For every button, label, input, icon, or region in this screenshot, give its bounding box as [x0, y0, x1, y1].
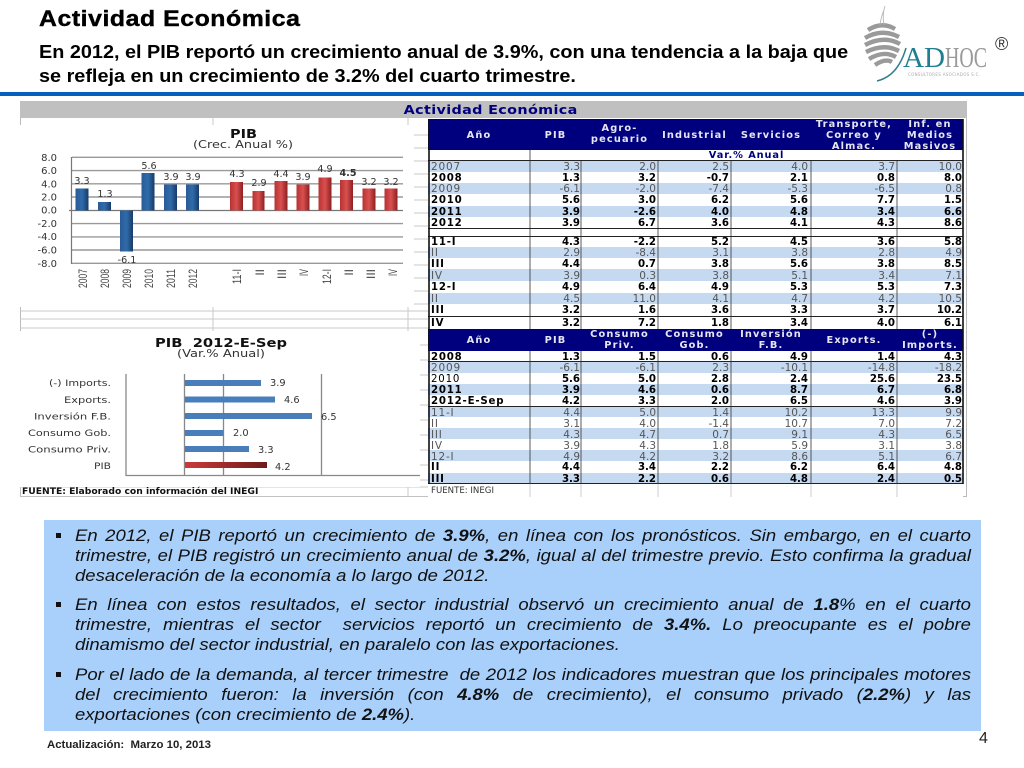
- table: demand rows: 2.0: [711, 396, 729, 407]
- panel: PIB 2012-E-Sep chart: Consumo Priv.: [28, 444, 111, 456]
- table: annual rows: 2012: [431, 218, 463, 229]
- table: demand rows: 1.8: [712, 440, 729, 452]
- table: quarterly rows: II: [431, 247, 439, 259]
- panel: PIB annual chart: 3.9: [295, 172, 311, 183]
- logo: ADHOC: AD: [903, 42, 945, 74]
- table: quarterly rows: 3.8: [712, 270, 729, 282]
- panel: PIB annual chart: 4.0: [41, 180, 57, 190]
- table: actividad header: Año: [467, 130, 491, 141]
- table: demand rows: 0.6: [711, 352, 729, 363]
- band heading: Actividad Económica: [404, 102, 578, 117]
- table: demand rows: 3.2: [712, 451, 729, 463]
- table: annual rows: -6.5: [874, 183, 895, 195]
- table: demand rows: 5.0: [638, 374, 656, 385]
- table: demand rows: 8.7: [790, 385, 808, 396]
- panel: PIB annual chart: -2.0: [37, 219, 57, 230]
- panel: PIB annual chart: -6.1: [118, 255, 136, 266]
- bullet 2: En línea con estos resultados, el sector industrial observó un crecimiento anual de 1.8% en el cuarto: [75, 595, 971, 614]
- table: quarterly rows: 10.2: [937, 305, 962, 316]
- table: quarterly rows: 1.8: [711, 318, 729, 329]
- table: quarterly rows: III: [431, 305, 445, 316]
- table: demand header: PIB: [545, 335, 566, 346]
- table: demand rows: 1.5: [638, 352, 656, 363]
- table: demand rows: 3.1: [878, 440, 895, 452]
- table: demand rows: 4.2: [562, 396, 580, 407]
- table: demand rows: 0.6: [711, 474, 729, 485]
- panel: PIB 2012-E-Sep chart: Exports.: [64, 395, 111, 406]
- table: quarterly rows: 4.2: [878, 293, 895, 305]
- table: annual rows: -0.7: [707, 173, 729, 184]
- table: annual rows: 10.0: [939, 161, 962, 173]
- table: demand rows: 6.5: [945, 429, 962, 441]
- panel: PIB 2012-E-Sep chart: PIB: [94, 461, 111, 472]
- table: demand rows: 4.4: [562, 462, 580, 473]
- panel: PIB annual chart: 4.9: [317, 164, 333, 175]
- table: quarterly rows: 10.5: [939, 293, 962, 305]
- table: quarterly rows: 2.8: [878, 247, 895, 259]
- table: demand rows: -10.1: [781, 362, 808, 374]
- table: demand header: Exports.: [826, 335, 882, 346]
- bullet 3: exportaciones (con crecimiento de 2.4%).: [75, 705, 415, 724]
- table: quarterly rows: 4.9: [945, 247, 962, 259]
- table: demand rows: 3.3: [562, 474, 580, 485]
- table: demand rows: 1.4: [712, 407, 729, 419]
- table: demand rows: 4.0: [639, 418, 656, 430]
- table: quarterly rows: 3.3: [790, 305, 808, 316]
- panel: PIB annual chart: 1.3: [97, 189, 113, 200]
- table: quarterly rows: 4.5: [790, 237, 808, 248]
- table: annual rows: 5.6: [562, 195, 580, 206]
- table: demand rows: 7.2: [945, 418, 962, 430]
- panel: PIB 2012-E-Sep chart: Consumo Gob.: [28, 428, 111, 439]
- panel: PIB 2012-E-Sep chart: 6.5: [321, 412, 337, 423]
- table: quarterly rows: 4.4: [562, 259, 580, 270]
- table: demand rows: 5.6: [562, 374, 580, 385]
- panel: PIB 2012-E-Sep chart: PIB 2012-E-Sep: [155, 335, 287, 350]
- panel: PIB 2012-E-Sep chart: Inversión F.B.: [34, 412, 111, 422]
- table: quarterly rows: 6.1: [944, 318, 962, 329]
- bullet 1: desaceleración de la economía a lo largo de 2012.: [75, 566, 489, 585]
- footer date: Actualización: Marzo 10, 2013: [47, 739, 211, 751]
- table: annual rows: 1.3: [562, 173, 580, 184]
- table: demand rows: 0.5: [944, 474, 962, 485]
- panel: PIB annual chart: IV: [386, 269, 400, 276]
- table: demand rows: FUENTE: INEGI: [431, 486, 494, 496]
- table: quarterly rows: 1.6: [638, 305, 656, 316]
- bullet 2: dinamismo del sector industrial, en paralelo con las exportaciones.: [75, 635, 620, 654]
- table: demand rows: 4.8: [944, 462, 962, 473]
- table: annual rows: 2.1: [790, 173, 808, 184]
- table: quarterly rows: II: [431, 293, 439, 305]
- table: annual rows: 6.2: [711, 195, 729, 206]
- table: demand header: Inversión: [740, 329, 802, 340]
- table: annual rows: 2007: [431, 161, 461, 173]
- table: demand rows: 4.3: [944, 352, 962, 363]
- panel: PIB 2012-E-Sep chart: 2.0: [233, 428, 249, 439]
- table: quarterly rows: 3.4: [790, 318, 808, 329]
- bullet 3: Por el lado de la demanda, al tercer trimestre de 2012 los indicadores muestran que los principales motores: [75, 665, 971, 684]
- logo: ADHOC: HOC: [945, 42, 987, 74]
- table: quarterly rows: 7.1: [945, 270, 962, 282]
- table: annual rows: 8.6: [944, 218, 962, 229]
- table: annual rows: 2.5: [712, 161, 729, 173]
- table: demand rows: 10.2: [785, 407, 808, 419]
- table: demand rows: -1.4: [708, 418, 729, 430]
- panel: PIB 2012-E-Sep chart: (-) Imports.: [49, 378, 111, 389]
- table: quarterly rows: 3.2: [562, 305, 580, 316]
- table: demand rows: 25.6: [870, 374, 895, 385]
- table: demand rows: 13.3: [872, 407, 895, 419]
- table: demand header: [428, 329, 963, 351]
- table: annual rows: -5.3: [788, 183, 808, 195]
- logo: ADHOC: [864, 6, 1008, 82]
- panel: PIB annual chart: 2010: [142, 269, 156, 288]
- table: quarterly rows: 3.6: [711, 305, 729, 316]
- panel: PIB annual chart: 5.6: [141, 161, 157, 172]
- table: quarterly rows: 5.3: [790, 282, 808, 293]
- table: quarterly rows: 3.6: [877, 237, 895, 248]
- table: quarterly rows: 8.5: [944, 259, 962, 270]
- table: demand rows: 5.9: [791, 440, 808, 452]
- table: actividad header: Servicios: [741, 130, 801, 141]
- table: demand rows: II: [431, 418, 439, 430]
- panel: PIB annual chart: 3.2: [383, 177, 399, 188]
- panel: PIB annual chart: 2009: [120, 269, 134, 288]
- table: demand rows: 4.3: [639, 440, 656, 452]
- table: annual rows: -2.0: [636, 183, 656, 195]
- table: annual rows: 0.8: [945, 183, 962, 195]
- table: demand header: Imports.: [902, 340, 958, 350]
- page number: 4: [979, 730, 988, 747]
- panel: PIB annual chart: 0.0: [41, 206, 57, 216]
- table: demand rows: 3.9: [562, 385, 580, 396]
- table: annual rows: 4.0: [711, 207, 729, 218]
- table: demand rows: III: [431, 474, 445, 485]
- table: actividad header: [428, 119, 963, 150]
- table: quarterly rows: -8.4: [636, 247, 656, 259]
- table: demand rows: 11-I: [431, 407, 454, 419]
- table: actividad header: Medios: [907, 130, 953, 141]
- table: demand rows: 6.2: [790, 462, 808, 473]
- panel: PIB annual chart: -6.0: [37, 246, 57, 256]
- panel: PIB annual chart: IV: [297, 269, 311, 276]
- panel: PIB annual chart: 2012: [186, 269, 200, 288]
- table: demand rows: 2.4: [877, 474, 895, 485]
- source note: chart: FUENTE: Elaborado con información del INEGI: [22, 486, 258, 497]
- table: demand rows: 1.3: [562, 352, 580, 363]
- panel: PIB annual chart: III: [275, 269, 289, 279]
- table: demand rows: 4.9: [563, 451, 580, 463]
- table: annual rows: 5.6: [790, 195, 808, 206]
- bullet 3: [56, 665, 971, 724]
- panel: PIB annual chart: 8.0: [41, 153, 57, 164]
- table: demand rows: [428, 352, 963, 497]
- table: annual rows: 2010: [431, 195, 463, 206]
- table: demand rows: 5.0: [639, 407, 656, 419]
- table: demand rows: 0.7: [712, 429, 729, 441]
- table: annual rows: 3.9: [562, 218, 580, 229]
- table: demand rows: 2012-E-Sep: [431, 396, 504, 407]
- table: demand rows: 3.9: [944, 396, 962, 407]
- table: demand rows: 2.2: [711, 462, 729, 473]
- table: annual rows: 3.2: [638, 173, 656, 184]
- panel: PIB annual chart: 4.5: [340, 168, 356, 179]
- table: demand header: (-): [922, 329, 938, 340]
- table: annual rows: 8.0: [944, 173, 962, 184]
- table: annual rows: 3.6: [711, 218, 729, 229]
- table: demand rows: 4.6: [877, 396, 895, 407]
- table: actividad header: Agro-: [602, 123, 637, 134]
- table: demand header: Año: [467, 335, 491, 346]
- table: demand rows: 4.3: [563, 429, 580, 441]
- table: quarterly rows: 5.6: [790, 259, 808, 270]
- table: quarterly rows: 4.0: [877, 318, 895, 329]
- table: demand rows: 9.9: [945, 407, 962, 419]
- panel: PIB annual chart: 2007: [76, 269, 90, 288]
- panel: PIB 2012-E-Sep chart: (Var.% Anual): [177, 348, 265, 360]
- bullet 2: trimestre, mientras el sector servicios reportó un crecimiento de 3.4%. Lo preocupante es el pobre: [75, 615, 971, 634]
- panel: PIB annual chart: III: [364, 269, 378, 279]
- table: quarterly rows: 0.3: [639, 270, 656, 282]
- panel: PIB annual chart: PIB: [230, 126, 257, 141]
- table: quarterly rows: 11.0: [633, 293, 656, 305]
- table: demand rows: 1.4: [877, 352, 895, 363]
- table: quarterly rows: [428, 228, 962, 329]
- panel: PIB annual chart: (Crec. Anual %): [193, 139, 293, 151]
- panel: PIB 2012-E-Sep chart: 4.6: [284, 395, 300, 406]
- table: quarterly rows: 3.7: [877, 305, 895, 316]
- table: demand header: F.B.: [759, 340, 783, 350]
- table: quarterly rows: 4.9: [562, 282, 580, 293]
- table: demand rows: 5.1: [878, 451, 895, 463]
- table: quarterly rows: IV: [431, 270, 443, 282]
- table: annual rows: 4.3: [877, 218, 895, 229]
- table: demand rows: IV: [431, 440, 443, 452]
- table: demand rows: 6.8: [944, 385, 962, 396]
- table: annual rows: 2009: [431, 183, 461, 195]
- panel: PIB annual chart: 2.9: [251, 178, 267, 189]
- subtitle: [39, 42, 848, 86]
- panel: commentary: [44, 520, 981, 731]
- title: Actividad Económica: [39, 6, 300, 31]
- table: annual rows: -6.1: [560, 183, 580, 195]
- table: quarterly rows: 2.9: [563, 247, 580, 259]
- panel: PIB annual chart: 2008: [98, 269, 112, 288]
- table: annual rows: 3.4: [877, 207, 895, 218]
- header rule: [0, 92, 1024, 96]
- table: demand rows: 12-I: [431, 451, 454, 463]
- table: annual rows: 3.0: [638, 195, 656, 206]
- table: demand header: Gob.: [679, 340, 710, 350]
- panel: PIB annual chart: 2.0: [41, 192, 57, 204]
- table: annual rows: 0.8: [877, 173, 895, 184]
- table: annual rows: -2.6: [634, 207, 656, 218]
- table: demand rows: 2.8: [711, 374, 729, 385]
- table: demand rows: -14.8: [868, 362, 895, 374]
- table: demand rows: 2011: [431, 385, 463, 396]
- table: quarterly rows: 3.2: [562, 318, 580, 329]
- table: quarterly rows: 4.7: [791, 293, 808, 305]
- table: quarterly rows: III: [431, 259, 445, 270]
- table: demand rows: 3.1: [563, 418, 580, 430]
- table: quarterly rows: 4.1: [712, 293, 729, 305]
- table: quarterly rows: 5.1: [791, 270, 808, 282]
- table: demand rows: 9.1: [791, 429, 808, 441]
- table: quarterly rows: 3.8: [877, 259, 895, 270]
- table: demand rows: 23.5: [937, 374, 962, 385]
- table: demand rows: 4.8: [790, 474, 808, 485]
- table: quarterly rows: 3.4: [878, 270, 895, 282]
- table: quarterly rows: 6.4: [638, 282, 656, 293]
- table: quarterly rows: 7.2: [638, 318, 656, 329]
- logo: ADHOC: ®: [995, 34, 1008, 54]
- table: annual rows: 2.0: [639, 161, 656, 173]
- table: quarterly rows: 5.8: [944, 237, 962, 248]
- row: var anual: Var.% Anual: [709, 150, 784, 161]
- table: annual rows: 7.7: [877, 195, 895, 206]
- table: annual rows: 4.1: [790, 218, 808, 229]
- table: quarterly rows: 0.7: [638, 259, 656, 270]
- table: annual rows: 2008: [431, 173, 463, 184]
- panel: PIB annual chart: [20, 125, 403, 307]
- subtitle: se refleja en un crecimiento de 3.2% del cuarto trimestre.: [39, 66, 576, 86]
- table: demand rows: 7.0: [878, 418, 895, 430]
- panel: PIB 2012-E-Sep chart: 4.2: [275, 462, 291, 473]
- table: quarterly rows: 3.1: [712, 247, 729, 259]
- table: quarterly rows: 3.9: [563, 270, 580, 282]
- table: annual rows: 3.7: [878, 161, 895, 173]
- table: demand rows: -6.1: [636, 362, 656, 374]
- table: demand header: Priv.: [604, 340, 635, 350]
- bullet 2: [56, 595, 971, 654]
- table: annual rows: 3.9: [562, 207, 580, 218]
- table: annual rows: 4.8: [790, 207, 808, 218]
- table: annual rows: -7.4: [708, 183, 729, 195]
- table: quarterly rows: 4.9: [711, 282, 729, 293]
- table: annual rows: 6.7: [638, 218, 656, 229]
- panel: PIB annual chart: 11-I: [230, 269, 244, 284]
- table: quarterly rows: 11-I: [431, 237, 456, 248]
- bullet 1: trimestre, el PIB registró un crecimiento anual de 3.2%, igual al del trimestre previo. Esto confirma la gradual: [75, 546, 971, 565]
- panel: PIB annual chart: 12-I: [320, 269, 334, 284]
- table: quarterly rows: 5.2: [711, 237, 729, 248]
- panel: PIB annual chart: 6.0: [41, 166, 57, 177]
- table: demand rows: -6.1: [560, 362, 580, 374]
- row: var anual: [428, 150, 963, 161]
- table: demand rows: 6.7: [945, 451, 962, 463]
- panel: PIB annual chart: 3.2: [361, 177, 377, 188]
- table: demand rows: 6.4: [877, 462, 895, 473]
- panel: PIB annual chart: 3.9: [163, 172, 179, 183]
- table: demand rows: 3.8: [945, 440, 962, 452]
- table: actividad header: Transporte,: [816, 119, 892, 130]
- table: demand header: Consumo: [590, 329, 649, 340]
- table: demand rows: III: [431, 429, 443, 441]
- table: demand rows: 2.3: [712, 362, 729, 374]
- table: actividad header: PIB: [545, 130, 566, 141]
- logo: ADHOC: CONSULTORES ASOCIADOS S.C.: [908, 72, 980, 77]
- bullet 3: del crecimiento fueron: la inversión (con 4.8% de crecimiento), el consumo privado (2.2%) y las: [75, 685, 971, 704]
- band heading: [20, 101, 967, 118]
- table: demand rows: 4.7: [639, 429, 656, 441]
- bullet 1: [56, 526, 972, 585]
- bullet 1: En 2012, el PIB reportó un crecimiento de 3.9%, en línea con los pronósticos. Sin embargo, en el cuarto: [75, 526, 971, 545]
- table: demand rows: 2.2: [638, 474, 656, 485]
- panel: PIB annual chart: II: [253, 269, 267, 276]
- table: actividad header: Masivos: [904, 141, 956, 152]
- panel: PIB annual chart: II: [342, 269, 356, 276]
- table: quarterly rows: 3.8: [791, 247, 808, 259]
- table: demand rows: 6.5: [790, 396, 808, 407]
- panel: PIB annual chart: 4.4: [273, 169, 289, 180]
- table: annual rows: [428, 161, 962, 229]
- panel: spreadsheet background: [20, 118, 967, 497]
- table: quarterly rows: 7.3: [944, 282, 962, 293]
- table: annual rows: 6.6: [944, 207, 962, 218]
- table: demand rows: 10.7: [785, 418, 808, 430]
- table: actividad header: Inf. en: [908, 119, 952, 130]
- table: actividad header: Correo y: [826, 130, 882, 141]
- table: demand rows: 2.4: [790, 374, 808, 385]
- panel: PIB annual chart: 2011: [164, 269, 178, 288]
- table: quarterly rows: 5.3: [877, 282, 895, 293]
- table: demand rows: 3.4: [638, 462, 656, 473]
- table: demand rows: 4.3: [878, 429, 895, 441]
- table: demand rows: 3.3: [638, 396, 656, 407]
- table: demand rows: -18.2: [935, 362, 962, 374]
- table: quarterly rows: 4.5: [563, 293, 580, 305]
- table: demand rows: 4.9: [790, 352, 808, 363]
- table: demand rows: 2009: [431, 362, 461, 374]
- table: demand rows: 4.4: [563, 407, 580, 419]
- table: annual rows: 4.0: [791, 161, 808, 173]
- table: actividad header: Industrial: [662, 130, 727, 141]
- table: quarterly rows: 4.3: [562, 237, 580, 248]
- table: demand rows: 0.6: [711, 385, 729, 396]
- table: annual rows: 1.5: [944, 195, 962, 206]
- table: annual rows: 2011: [431, 207, 463, 218]
- table: quarterly rows: 12-I: [431, 282, 456, 293]
- panel: PIB annual chart: 4.3: [229, 169, 245, 180]
- table: demand header: Consumo: [665, 329, 724, 340]
- panel: PIB annual chart: -4.0: [37, 232, 57, 243]
- panel: PIB 2012-E-Sep chart: [20, 331, 420, 487]
- subtitle: En 2012, el PIB reportó un crecimiento anual de 3.9%, con una tendencia a la baja que: [39, 42, 848, 62]
- table: demand rows: 4.6: [638, 385, 656, 396]
- table: demand rows: 6.7: [877, 385, 895, 396]
- panel: PIB 2012-E-Sep chart: 3.9: [270, 378, 286, 389]
- table: demand rows: 2010: [431, 374, 460, 385]
- table: actividad header: pecuario: [591, 134, 648, 145]
- table: demand rows: 2008: [431, 352, 463, 363]
- panel: PIB annual chart: 3.9: [185, 172, 201, 183]
- table: quarterly rows: IV: [431, 318, 444, 329]
- panel: PIB 2012-E-Sep chart: 3.3: [258, 445, 274, 456]
- table: demand rows: 4.2: [639, 451, 656, 463]
- table: quarterly rows: -2.2: [634, 237, 656, 248]
- table: demand rows: 8.6: [791, 451, 808, 463]
- table: annual rows: 3.3: [563, 161, 580, 173]
- table: quarterly rows: 3.8: [711, 259, 729, 270]
- panel: PIB annual chart: 3.3: [74, 176, 90, 187]
- table: demand rows: II: [431, 462, 440, 473]
- table grid lines: [428, 119, 964, 497]
- table: demand rows: 3.9: [563, 440, 580, 452]
- panel: PIB annual chart: -8.0: [37, 259, 57, 270]
- table: actividad header: Almac.: [832, 141, 876, 152]
